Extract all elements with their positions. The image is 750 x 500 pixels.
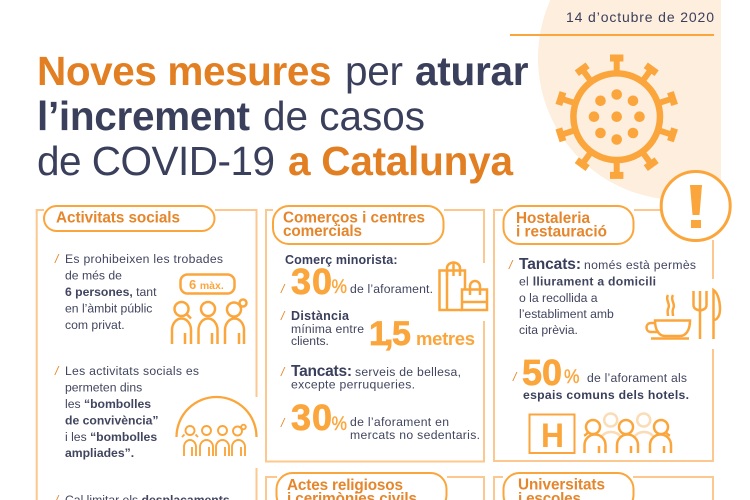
stat: 30 percent: /	[280, 282, 286, 296]
title: de COVID-19	[37, 138, 275, 184]
stat: 30 percent: de l’aforament.	[350, 282, 433, 296]
title: de casos	[263, 93, 425, 139]
panel: comerços	[266, 206, 487, 462]
stat: 30 percent: 30	[291, 261, 332, 302]
text: bombolles: permeten dins	[65, 380, 142, 394]
stat: 50 percent	[512, 352, 689, 402]
text: distancia: /	[280, 309, 286, 323]
text: tancats: excepte perruqueries.	[291, 378, 415, 392]
stat: 30 percent markets: /	[280, 416, 286, 430]
heading: activitats socials	[44, 206, 214, 231]
panel: activitats socials	[37, 206, 257, 500]
heading: comerços: Comerços i centres	[283, 210, 425, 227]
text: bombolles: les “bombolles	[65, 397, 151, 411]
title	[37, 48, 529, 184]
title: l’increment	[37, 93, 250, 139]
text: tancats hostaleria: /	[508, 258, 514, 272]
stat: 30 percent markets	[280, 397, 480, 442]
text: tancats hostaleria: el lliurament a domicili	[519, 274, 656, 288]
stat: 30 percent markets: de l’aforament en	[350, 415, 449, 429]
stat: 50 percent: espais comuns dels hotels.	[523, 388, 689, 402]
stat: 1,5 metres: 1,5	[369, 315, 411, 353]
text: bombolles: i les “bombolles	[65, 430, 157, 444]
icon: shopping bags	[440, 263, 487, 310]
stat: 30 percent: %	[332, 277, 347, 298]
title: aturar	[415, 48, 529, 94]
icon: hotel sign	[530, 414, 574, 455]
text: trobades: Es prohibeixen les trobades	[65, 252, 223, 266]
text: trobades: 6 persones, tant	[65, 285, 157, 299]
text: tancats hostaleria: l’establiment amb	[519, 307, 614, 321]
panel: actes religiosos	[266, 473, 484, 500]
text: tancats hostaleria: o la recollida a	[519, 291, 598, 305]
text: distancia	[280, 309, 364, 348]
title: Noves mesures	[37, 48, 332, 94]
text: trobades: de més de	[65, 268, 122, 282]
text: trobades	[54, 252, 223, 332]
icon: exclamation	[661, 172, 730, 240]
heading: hostaleria: Hostaleria	[516, 210, 590, 227]
stat: 50 percent: /	[512, 370, 518, 384]
text: tancats hostaleria: Tancats:	[519, 256, 581, 273]
text: trobades: /	[54, 252, 60, 266]
heading: comerços: comercials	[283, 223, 362, 240]
text: trobades: en l’àmbit públic	[65, 302, 152, 316]
text: tancats: /	[280, 365, 286, 379]
stat: 50 percent: de l’aforament als	[587, 371, 687, 385]
icon: cup and cutlery	[646, 290, 720, 339]
text: bombolles: /	[54, 364, 60, 378]
icon: hotel sign: H	[541, 417, 564, 455]
text: distancia: mínima entre	[291, 322, 364, 336]
heading: actes religiosos	[276, 473, 446, 500]
stat: 30 percent markets: 30	[291, 397, 332, 438]
stat: 30 percent	[280, 261, 433, 302]
panel: hostaleria	[494, 172, 730, 461]
icon: hotel group	[584, 414, 671, 453]
text: tancats hostaleria: només està permès	[584, 258, 696, 272]
heading: universitats: Universitats	[518, 476, 605, 494]
stat: 50 percent: %	[564, 367, 580, 388]
date rule	[510, 34, 714, 36]
title: per	[345, 48, 403, 94]
icon: three people	[172, 300, 246, 344]
stat: 30 percent markets: %	[332, 414, 347, 435]
text: bombolles: Les activitats socials es	[65, 364, 199, 378]
text: trobades: com privat.	[65, 318, 125, 332]
icon: bubble with people	[176, 397, 256, 456]
stat: 1,5 metres: metres	[416, 328, 475, 349]
background circle	[538, 0, 721, 198]
text: comerç minorista: Comerç minorista:	[285, 253, 398, 267]
date: 14 d’octubre de 2020	[566, 9, 714, 25]
heading: actes religiosos: Actes religiosos	[287, 477, 403, 494]
text: tancats hostaleria	[508, 256, 696, 337]
text: distancia: Distància	[291, 309, 350, 323]
icon: virus	[555, 54, 678, 179]
text: bombolles: de convivència”	[65, 414, 158, 428]
stat: 50 percent: 50	[522, 352, 562, 393]
title: a Catalunya	[288, 138, 513, 184]
panel: universitats	[494, 473, 713, 500]
stat: 1,5 metres	[369, 315, 475, 353]
heading: activitats socials: Activitats socials	[56, 210, 180, 227]
text: tancats	[280, 363, 461, 392]
text: bombolles: ampliades”.	[65, 446, 134, 460]
heading: comerços	[273, 206, 444, 244]
badge: 6 max: 6 màx.	[189, 277, 224, 292]
text: tancats: serveis de bellesa,	[355, 365, 461, 379]
heading: universitats	[504, 473, 634, 500]
text: distancia: clients.	[291, 334, 329, 348]
text: tancats hostaleria: cita prèvia.	[519, 323, 578, 337]
heading: hostaleria: i restauració	[516, 224, 607, 240]
heading: hostaleria	[504, 206, 634, 244]
stat: 30 percent markets: mercats no sedentaris.	[350, 428, 480, 442]
text: tancats: Tancats:	[291, 363, 352, 380]
text: bombolles	[54, 364, 199, 460]
badge: 6 max	[180, 274, 234, 294]
